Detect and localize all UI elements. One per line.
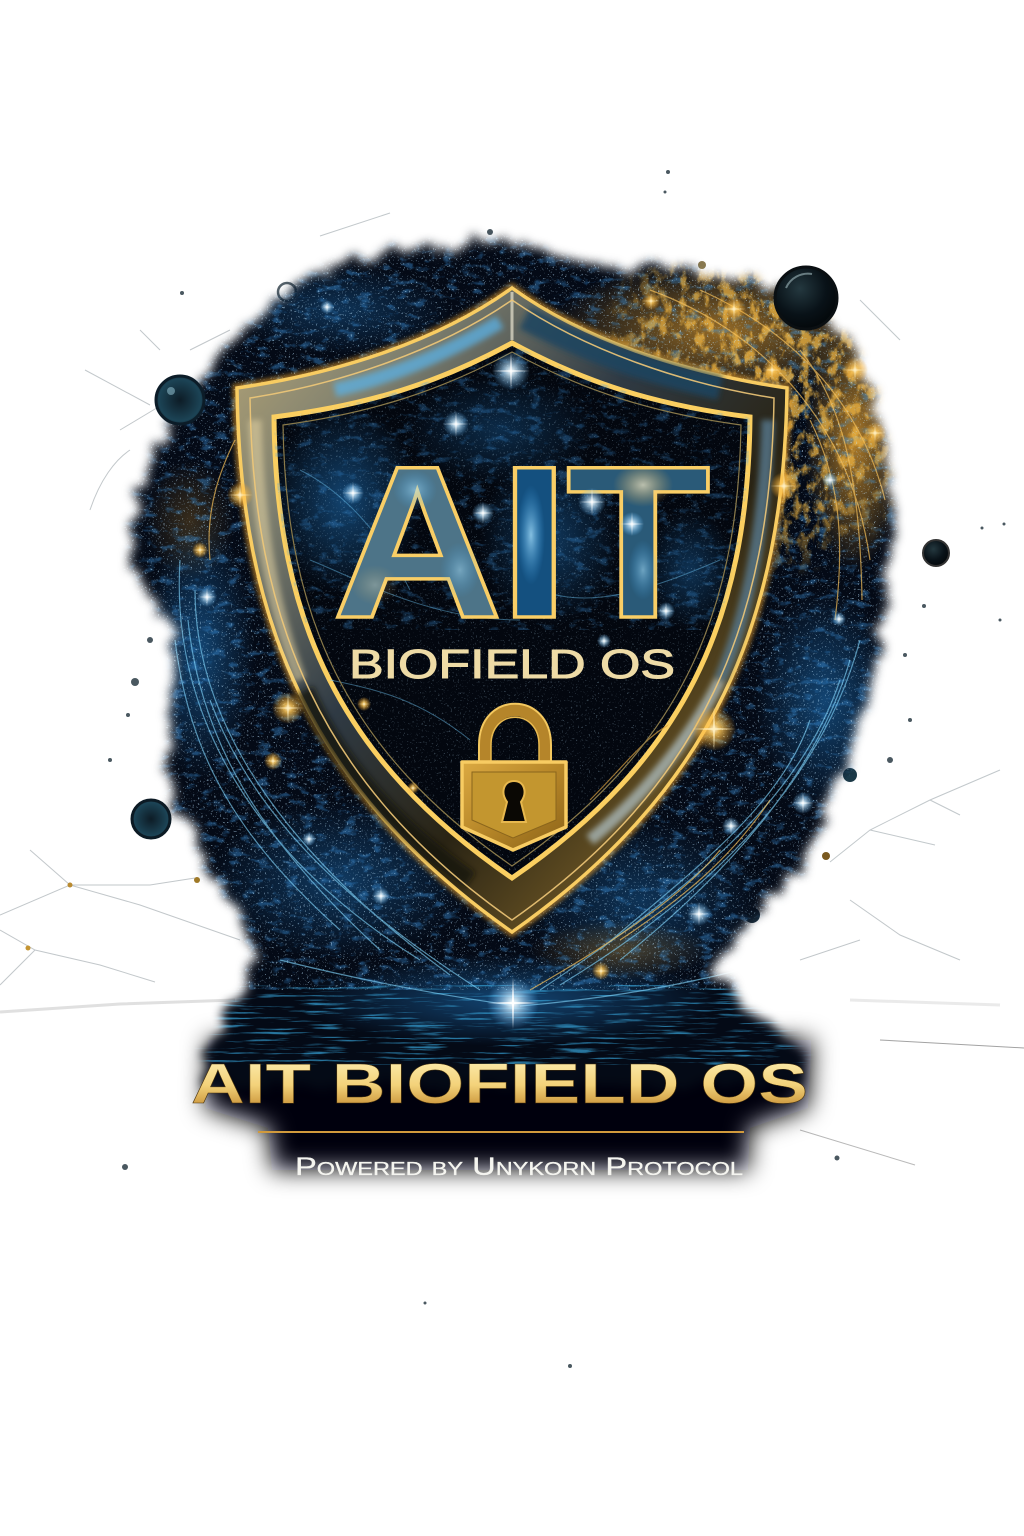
gold divider (258, 1131, 744, 1133)
shield (237, 288, 787, 932)
dark inner field (274, 343, 750, 878)
debris wisps and fine lines (0, 213, 1024, 1165)
orb: right (923, 540, 949, 566)
debris dots (26, 170, 1006, 1368)
letter A: A (332, 422, 503, 664)
icon: padlock (462, 704, 566, 850)
swirling strands (175, 290, 885, 1006)
monogram glass highlights (351, 463, 673, 605)
energy cloud (100, 200, 920, 1170)
mid gold line (250, 300, 774, 920)
subtitle in shield: BIOFIELD OS (349, 641, 675, 687)
keyhole (502, 781, 526, 822)
inner nebula (270, 340, 755, 880)
orb: top right (775, 267, 837, 329)
letter I: I (497, 421, 572, 663)
logo scene (0, 170, 1024, 1368)
inner double line (283, 352, 741, 866)
sparkles (192, 292, 886, 1029)
bevel highlights (255, 292, 768, 880)
main title: AIT BIOFIELD OS (191, 1052, 808, 1116)
cloud colour glows and texture (100, 200, 920, 1100)
lock body (462, 762, 566, 850)
tagline: Powered by Unykorn Protocol (295, 1153, 743, 1181)
soft dark title band (205, 1040, 812, 1170)
shield outer bevel (237, 288, 787, 932)
orb: lower left (132, 800, 170, 838)
orb: left (156, 376, 204, 424)
shackle (485, 710, 545, 765)
AIT monogram (332, 421, 710, 664)
outer glow (237, 288, 787, 932)
letter T: T (566, 422, 710, 664)
